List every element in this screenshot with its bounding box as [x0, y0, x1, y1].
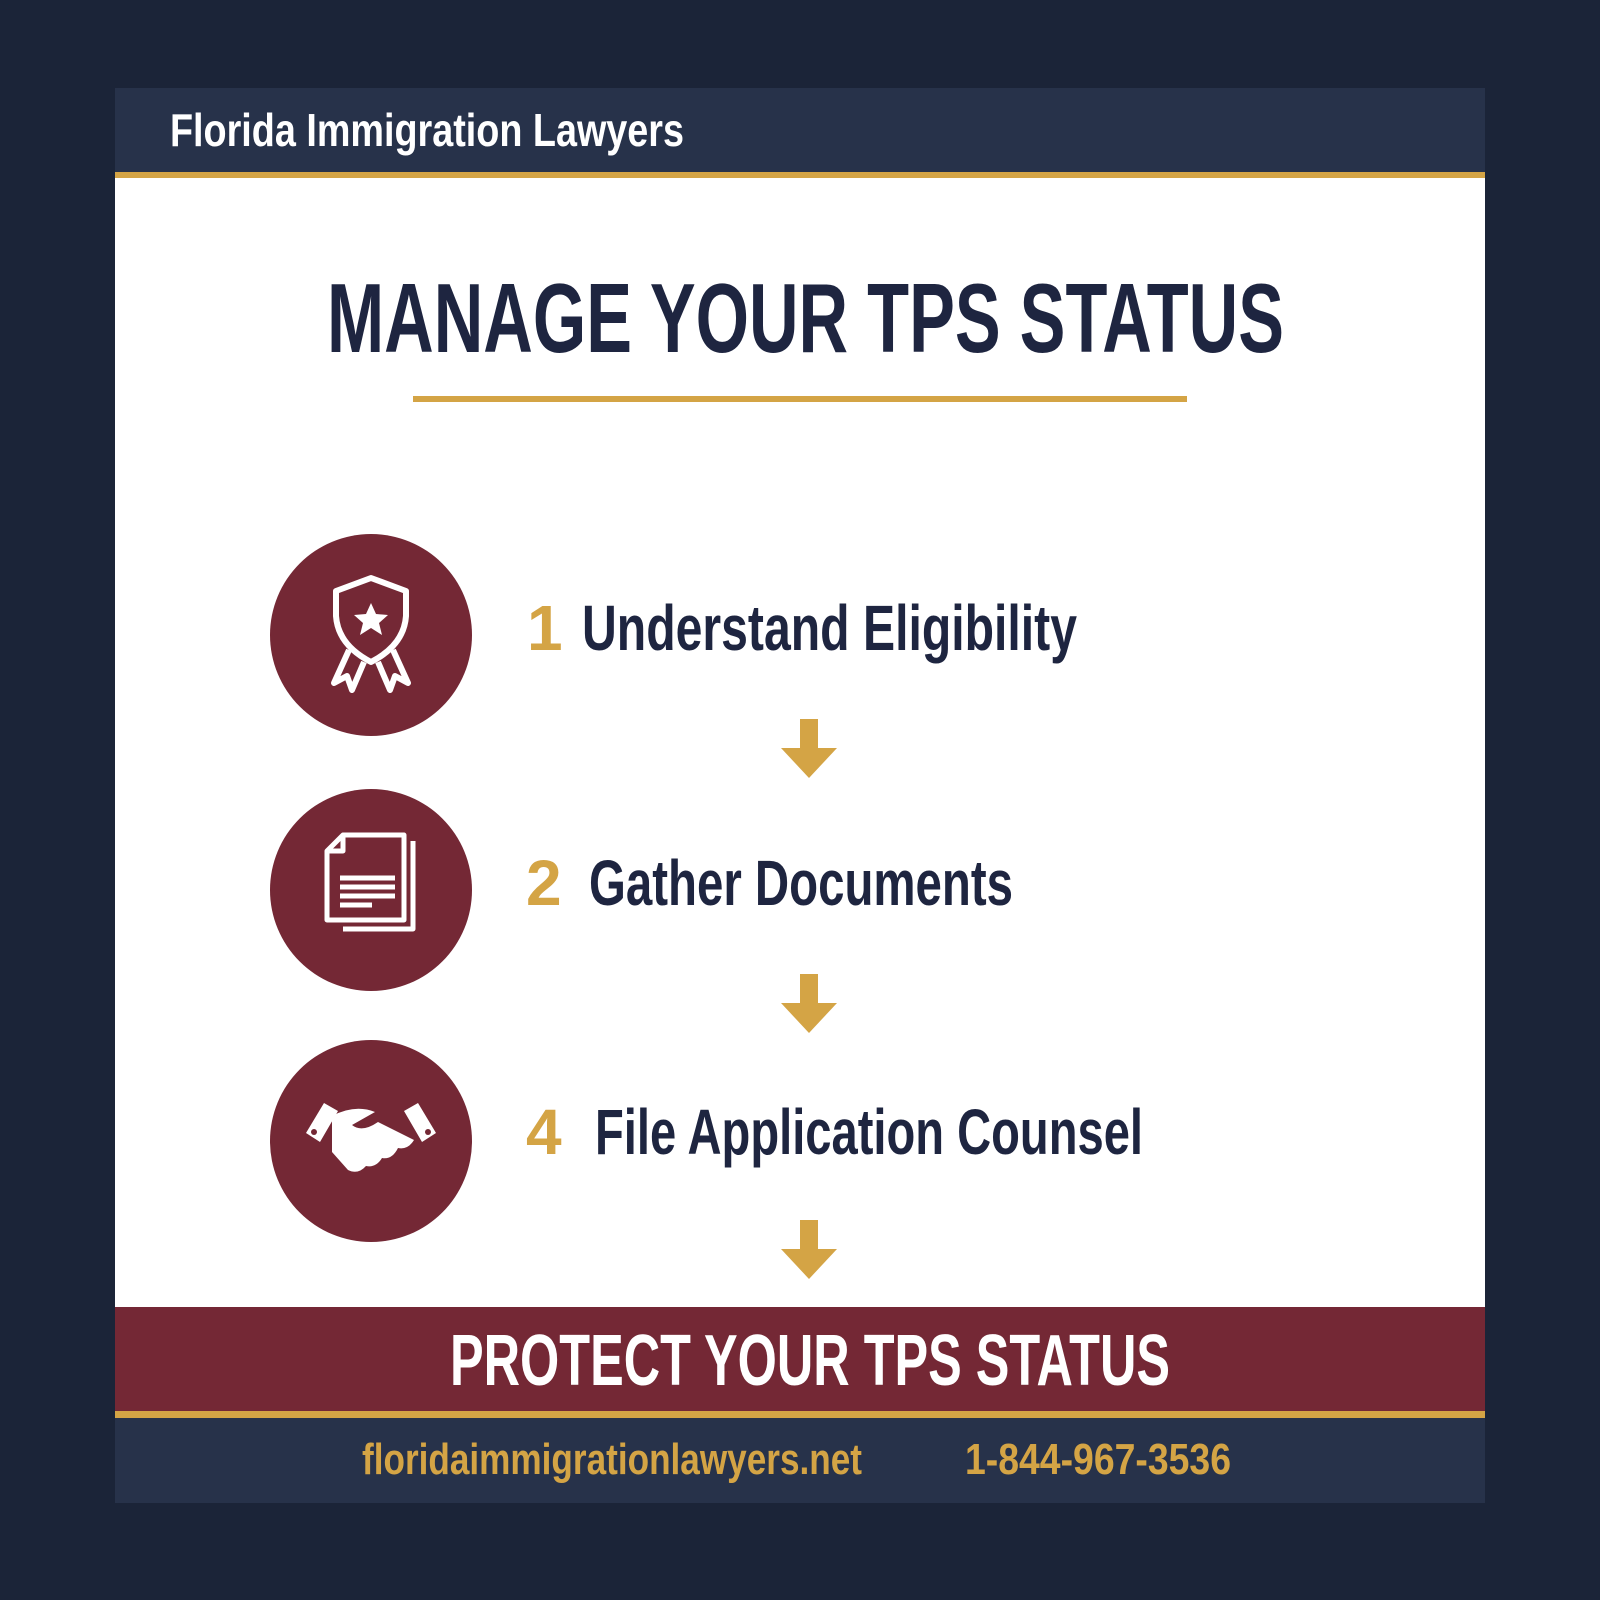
- icon: documents: [270, 789, 472, 991]
- website: floridaimmigrationlawyers.net: [362, 1435, 862, 1484]
- step 1: [270, 534, 1077, 736]
- step number 4: 4: [526, 1096, 562, 1168]
- step number 1: 1: [527, 592, 563, 664]
- icon: handshake: [270, 1040, 472, 1242]
- icon: shield badge: [270, 534, 472, 736]
- arrow 3: [781, 1220, 837, 1279]
- step 3: [270, 1040, 1143, 1242]
- footer: [115, 1418, 1485, 1503]
- arrow 1: [781, 719, 837, 778]
- phone: 1-844-967-3536: [965, 1435, 1231, 1484]
- banner: protect: PROTECT YOUR TPS STATUS: [450, 1321, 1170, 1401]
- card: [115, 88, 1485, 1503]
- step label 2: Gather Documents: [589, 847, 1013, 919]
- step 2: [270, 789, 1013, 991]
- step label 1: Understand Eligibility: [582, 592, 1077, 664]
- banner: protect: [115, 1307, 1485, 1411]
- header bar: [115, 88, 1485, 178]
- step label 3: File Application Counsel: [595, 1096, 1143, 1168]
- step number 2: 2: [526, 847, 562, 919]
- title underline: [413, 396, 1187, 402]
- header text: Florida Immigration Lawyers: [170, 104, 684, 156]
- arrow 2: [781, 974, 837, 1033]
